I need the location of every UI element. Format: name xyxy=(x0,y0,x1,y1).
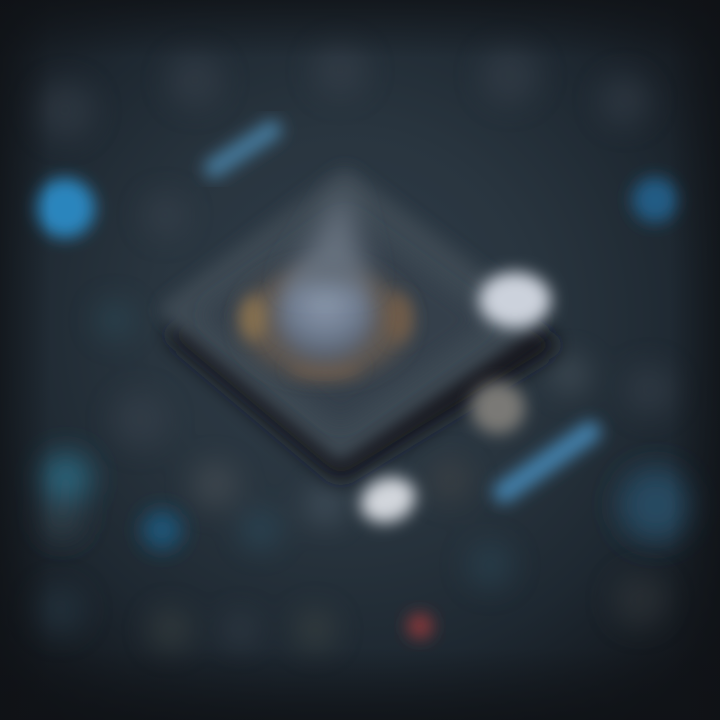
diamond inner xyxy=(215,225,475,415)
icon: white blob bottom xyxy=(354,470,422,530)
icon: teal circle lower right xyxy=(618,467,694,543)
icon: red dot xyxy=(407,613,433,639)
cone highlight xyxy=(285,185,370,285)
icon: teal circle lower left xyxy=(40,452,92,540)
diamond shadow xyxy=(180,210,545,470)
diamond plate xyxy=(172,180,530,450)
panel: central diamond xyxy=(172,180,545,470)
icon: blue bar top xyxy=(214,130,272,168)
icon: blue bar lower right xyxy=(504,432,590,492)
icon: grey blob right xyxy=(471,382,525,434)
icon: blue circle lower left xyxy=(142,510,182,550)
orange ring xyxy=(241,266,409,378)
icon: blue circle top left xyxy=(35,178,95,238)
globe xyxy=(275,267,375,363)
ring warm sides xyxy=(240,294,412,378)
icon: blue circle top right xyxy=(632,177,678,223)
faint background icons xyxy=(34,42,676,652)
icon: white blob right xyxy=(479,272,551,328)
